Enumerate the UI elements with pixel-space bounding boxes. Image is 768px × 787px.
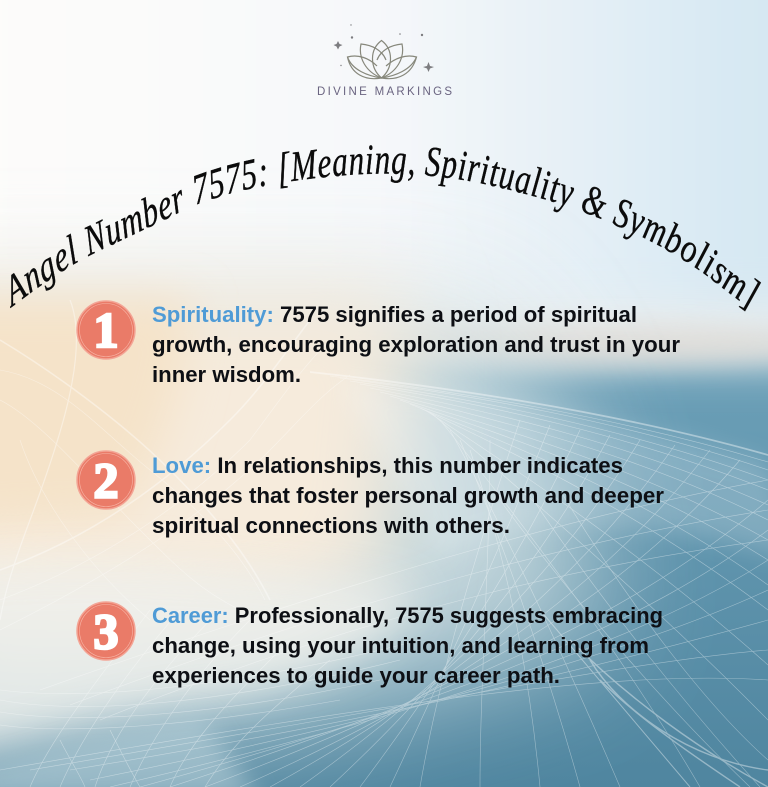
number badge 2	[77, 451, 135, 509]
number badge 3: 3	[94, 603, 118, 659]
item 1: Spirituality: inner wisdom.	[152, 362, 301, 387]
item 1: Spirituality: growth, encouraging exploration and trust in your	[152, 332, 680, 357]
item 2: Love	[77, 451, 664, 538]
item 2: Love: spiritual connections with others.	[152, 513, 510, 538]
number badge 1	[77, 301, 135, 359]
text block: Spirituality: Spirituality: 7575 signifies a period of spiritual	[152, 302, 637, 327]
text block: Career: Career: Professionally, 7575 suggests embracing	[152, 603, 663, 628]
item 2: Love: changes that foster personal growth and deeper	[152, 483, 664, 508]
title: curved heading: Angel Number 7575: [Meaning, Spirituality & Symbolism]	[10, 145, 762, 312]
item 3: Career: change, using your intuition, and learning from	[152, 633, 649, 658]
number badge 1: 1	[94, 302, 118, 358]
logo wordmark: DIVINE MARKINGS	[317, 86, 452, 98]
item 3: Career	[77, 602, 663, 688]
number badge 2: 2	[94, 452, 118, 508]
logo: Divine Markings	[317, 24, 452, 98]
background: fine mesh lines	[0, 300, 768, 787]
item 1: Spirituality	[77, 301, 680, 387]
text block: Love: Love: In relationships, this number indicates	[152, 453, 623, 478]
icon: lotus	[348, 40, 416, 79]
icon: sparkles	[334, 24, 434, 72]
item 3: Career: experiences to guide your career path.	[152, 663, 560, 688]
number badge 3	[77, 602, 135, 660]
